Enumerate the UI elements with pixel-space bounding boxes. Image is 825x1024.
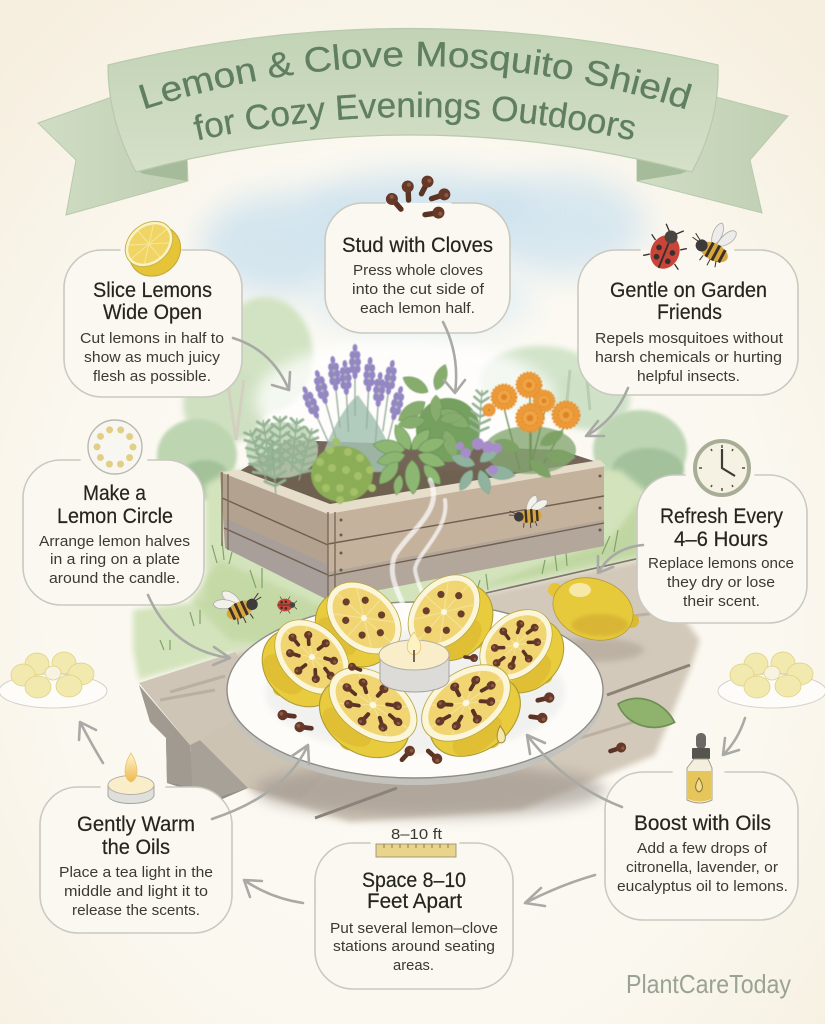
- brand logo text: PlantCareToday: [626, 969, 791, 999]
- body text: stations around seating: [333, 938, 495, 955]
- panel: gentle on garden friends: [578, 250, 798, 395]
- body text: Add a few drops of: [637, 840, 768, 857]
- bee in flight: [210, 578, 268, 632]
- body text: [617, 840, 788, 895]
- steam: [392, 480, 445, 630]
- heading: Boost with Oils: [634, 812, 771, 835]
- arrows: [79, 322, 745, 906]
- sky and tree washes: [133, 173, 687, 680]
- heading line 2: Friends: [657, 301, 722, 324]
- arrow: garden friends to flowers: [586, 388, 628, 436]
- icon: ladybug: [641, 220, 693, 275]
- panel: stud with cloves: [325, 203, 510, 333]
- arrow: refresh to lemon: [598, 545, 643, 573]
- body text: Repels mosquitoes without: [595, 330, 784, 347]
- lemon halves with cloves: [245, 561, 580, 776]
- body text: middle and light it to: [64, 883, 208, 900]
- icon: plate ring: [88, 420, 142, 474]
- icon: bee: [684, 223, 736, 272]
- arrow: right plate to oil: [723, 718, 745, 755]
- body text: Cut lemons in half to: [80, 330, 224, 347]
- body text: [648, 555, 794, 610]
- arrow: spacing to warm: [244, 880, 303, 903]
- body text: citronella, lavender, or: [626, 859, 778, 876]
- title line 2: for Cozy Evenings Outdoors: [193, 92, 635, 140]
- heading line 2: the Oils: [102, 836, 170, 859]
- body text: [330, 920, 498, 974]
- left face: [220, 472, 328, 600]
- heading line 2: Feet Apart: [367, 890, 462, 913]
- icon: oil bottle: [687, 733, 712, 803]
- heading: Gentle on Garden: [610, 279, 767, 302]
- rustic table: [139, 558, 700, 822]
- lavender: [298, 344, 407, 472]
- icon: tea light: [108, 753, 154, 804]
- leaf on table: [614, 692, 679, 735]
- body text: show as much juicy: [84, 349, 221, 366]
- heading line 2: 4–6 Hours: [674, 528, 768, 551]
- ladybug: [277, 596, 297, 614]
- panel: boost with oils: [605, 772, 798, 920]
- body text: harsh chemicals or hurting: [595, 349, 782, 366]
- banner body: [108, 28, 718, 172]
- panel: gently warm the oils: [40, 787, 232, 933]
- arrow: circle to plate: [148, 595, 230, 665]
- heading: Gently Warm: [77, 813, 195, 836]
- front basil: [372, 422, 447, 496]
- side plates: [0, 652, 107, 708]
- clove on table: [609, 741, 628, 757]
- body text: Place a tea light in the: [59, 864, 213, 881]
- body text: areas.: [393, 957, 434, 974]
- grass: [160, 530, 618, 650]
- front face: [328, 466, 604, 600]
- heading: Slice Lemons: [93, 279, 212, 302]
- thyme: [311, 438, 376, 504]
- white plate: [227, 602, 603, 785]
- body text: [352, 262, 485, 317]
- icon: ruler: 8–10 ft: [391, 826, 443, 843]
- arrow: oils to spacing: [525, 875, 595, 906]
- icon: lemon slice: [115, 211, 191, 287]
- body text: Arrange lemon halves: [39, 533, 190, 550]
- arrow: warm to plate: [212, 745, 309, 819]
- loose cloves on plate: [278, 654, 556, 766]
- body text: flesh as possible.: [93, 368, 211, 385]
- body text: they dry or lose: [667, 574, 775, 591]
- bee on bed: [508, 495, 549, 529]
- heading: Stud with Cloves: [342, 234, 493, 257]
- body text: around the candle.: [49, 570, 180, 587]
- body text: their scent.: [683, 593, 760, 610]
- body text: into the cut side of: [352, 281, 485, 298]
- icon: cloves: [383, 174, 452, 222]
- icon: ruler: [376, 826, 456, 857]
- fern herb: [240, 416, 323, 495]
- heading: Refresh Every: [660, 505, 783, 528]
- purple flower plant: [449, 438, 516, 496]
- arrow: oils to plate: [527, 735, 622, 807]
- right ribbon tail: [637, 97, 788, 213]
- heading: Space 8–10: [362, 869, 466, 892]
- raised garden bed: [220, 440, 606, 602]
- body text: Replace lemons once: [648, 555, 794, 572]
- body text: release the scents.: [72, 902, 200, 919]
- panel: space 8-10 feet apart: [315, 843, 513, 989]
- title line 1: Lemon & Clove Mosquito Shield: [138, 42, 692, 109]
- body text: helpful insects.: [637, 368, 740, 385]
- heading: Make a: [83, 482, 146, 505]
- body text: in a ring on a plate: [50, 551, 180, 568]
- panel: slice lemons: [64, 250, 242, 397]
- body text: eucalyptus oil to lemons.: [617, 878, 788, 895]
- marigold plant: [469, 372, 580, 482]
- left ribbon tail: [38, 97, 188, 215]
- body text: [80, 330, 224, 385]
- body text: each lemon half.: [360, 300, 475, 317]
- body text: [39, 533, 190, 587]
- body text: [59, 864, 213, 919]
- arrow: slice to bed: [233, 338, 290, 390]
- body text: Put several lemon–clove: [330, 920, 498, 937]
- arrow: warm to left plate: [79, 722, 103, 763]
- back basil: [394, 362, 480, 462]
- arrow: cloves to bed: [443, 322, 465, 393]
- herbs and flowers: [240, 344, 579, 504]
- panel: refresh every 4-6 hours: [637, 475, 807, 623]
- panel: make a lemon circle: [23, 460, 204, 605]
- whole lemon: [545, 568, 641, 650]
- soil: [238, 440, 600, 506]
- heading line 2: Lemon Circle: [57, 505, 173, 528]
- body text: Press whole cloves: [353, 262, 483, 279]
- title banner: [37, 28, 789, 216]
- icon: clock: [695, 441, 749, 495]
- tea light candle on plate: [379, 632, 449, 692]
- heading line 2: Wide Open: [103, 301, 202, 324]
- body text: [595, 330, 784, 385]
